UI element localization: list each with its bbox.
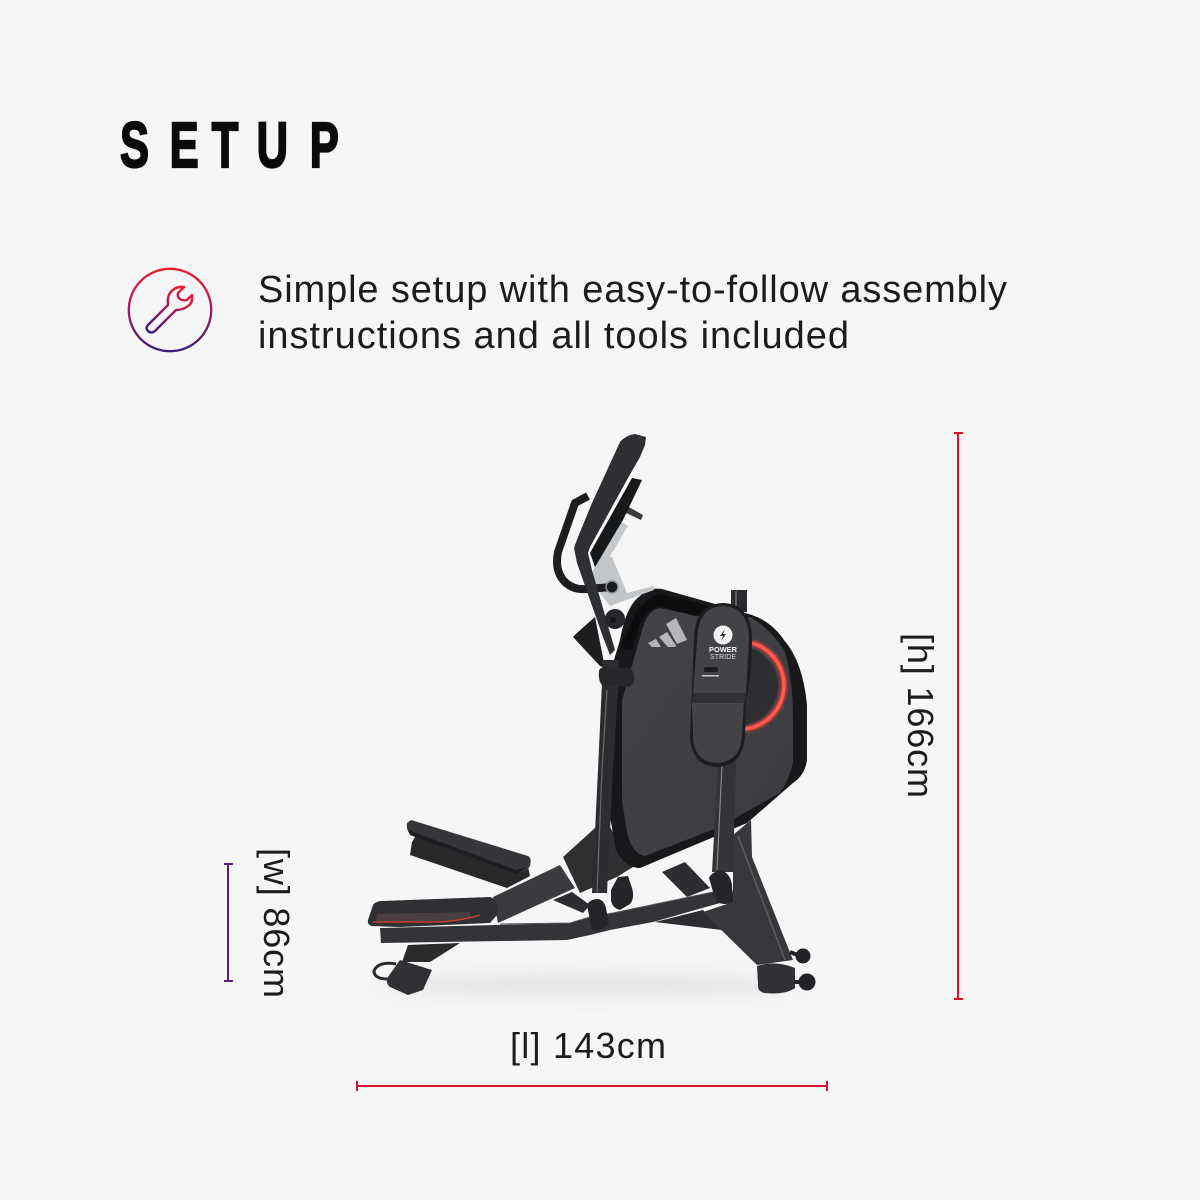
console	[690, 590, 752, 767]
console logo disc	[714, 626, 732, 644]
display black edge	[590, 478, 642, 567]
dimension: length	[357, 1025, 827, 1091]
height label: [h] 166cm	[900, 633, 941, 798]
body shroud	[605, 589, 807, 868]
setup description text: instructions and all tools included	[258, 315, 849, 357]
width label: [w] 86cm	[256, 848, 297, 998]
pedal arm and housing	[493, 827, 633, 923]
infographic canvas	[120, 120, 1007, 1091]
clasp front post	[587, 899, 609, 930]
rear A-frame leg	[703, 820, 793, 965]
rear pedal	[407, 820, 531, 888]
setup description text: Simple setup with easy-to-follow assembly	[258, 269, 1007, 311]
upright posts	[592, 609, 625, 893]
title: SETUP	[120, 109, 339, 181]
console brand text: POWER	[709, 645, 738, 654]
floor shadow	[375, 973, 805, 997]
rear base beams	[553, 862, 722, 930]
elliptical trainer illustration	[368, 434, 816, 997]
grey side panel	[622, 608, 793, 856]
clasp rear post	[709, 871, 733, 904]
outer handlebar band	[574, 434, 646, 655]
small roller under body	[611, 876, 633, 910]
icon: wrench in gradient circle	[129, 269, 211, 351]
main lower frame	[380, 871, 733, 943]
front foot stabiliser	[374, 943, 460, 995]
length label: [l] 143cm	[510, 1025, 666, 1066]
red flywheel ring	[745, 638, 789, 734]
silver seat-post bracket	[573, 506, 654, 668]
rear foot and transport wheels	[757, 948, 816, 993]
dimension: height	[900, 433, 963, 999]
handle arm and clasp	[599, 638, 695, 687]
rear post	[712, 762, 736, 872]
setup description text	[258, 269, 1007, 357]
dimension: width	[224, 848, 297, 998]
adidas style three bar mark	[648, 618, 687, 647]
inner handlebar	[557, 496, 612, 589]
console: STRIDE	[710, 654, 736, 661]
front pedal	[368, 897, 498, 927]
